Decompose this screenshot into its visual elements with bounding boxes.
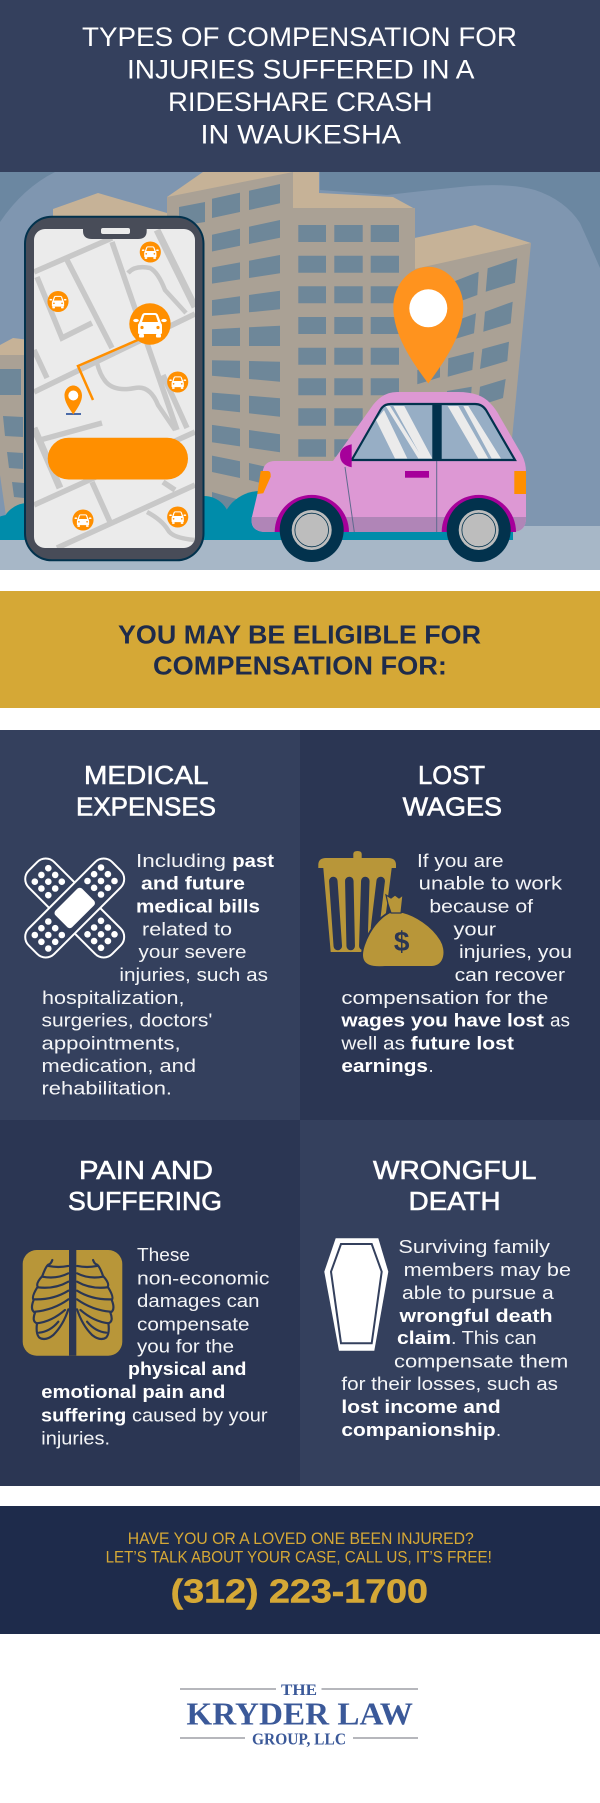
building: centre left [167, 172, 293, 530]
heading: wrongful death: DEATH [409, 1186, 501, 1216]
route line [78, 339, 140, 400]
big location pin [393, 267, 463, 384]
title banner [0, 0, 600, 172]
icon: bandages [20, 854, 129, 962]
title: RIDESHARE CRASH [168, 87, 432, 117]
body text: medical expenses: Including [136, 850, 226, 871]
icon: trash can and money bag: $ [394, 926, 410, 957]
phone number: (312) 223-1700 [171, 1573, 428, 1610]
body text: pain and suffering [41, 1244, 269, 1448]
heading: pain and suffering: SUFFERING [68, 1186, 222, 1216]
icon: coffin [324, 1238, 388, 1351]
eligibility heading: YOU MAY BE ELIGIBLE FOR [118, 620, 481, 650]
map roads [34, 230, 195, 548]
call to action text: LET’S TALK ABOUT YOUR CASE, CALL US, IT’S FREE! [106, 1548, 492, 1566]
eligibility banner [0, 591, 600, 708]
body text: wrongful death: claim [397, 1327, 451, 1348]
body text: medical expenses: hospitalization, [42, 987, 184, 1008]
car markers [47, 241, 188, 531]
body text: wrongful death: Surviving family [398, 1236, 551, 1257]
body text: medical expenses: medical bills [136, 896, 260, 916]
notch [83, 228, 147, 239]
icon: rib cage [23, 1250, 122, 1356]
car [252, 392, 526, 562]
ground [0, 540, 500, 570]
body text: medical expenses: and future [141, 872, 245, 894]
body text: wrongful death: . This can [451, 1327, 536, 1348]
building: centre [293, 172, 415, 461]
body text: wrongful death: able to pursue a [402, 1282, 555, 1303]
building: far left [0, 338, 24, 514]
body text: lost wages: can recover [455, 964, 565, 985]
body text: lost wages: injuries, you [459, 941, 572, 962]
heading: pain and suffering [68, 1155, 222, 1216]
body text: wrongful death: for their losses, such as [341, 1373, 558, 1394]
body text: lost wages: well as [340, 1032, 405, 1054]
body text: lost wages: . [428, 1055, 434, 1076]
body text: medical expenses: past [232, 850, 274, 871]
title: IN WAUKESHA [200, 120, 401, 150]
body text: lost wages [340, 850, 572, 1076]
phone [25, 217, 204, 560]
title: INJURIES SUFFERED IN A [127, 54, 475, 84]
body text: pain and suffering: compensate [137, 1313, 250, 1334]
body text: pain and suffering: injuries. [41, 1428, 110, 1448]
panel: lost wages [300, 730, 600, 1120]
body text: lost wages: as [550, 1010, 570, 1030]
body text: pain and suffering: These [137, 1244, 190, 1265]
body text: lost wages: compensation for the [341, 987, 548, 1008]
panel: medical expenses [0, 730, 300, 1120]
call to action banner [0, 1506, 600, 1634]
panel: wrongful death [300, 1120, 600, 1486]
orange button [48, 438, 188, 480]
body text: lost wages: If you are [417, 850, 504, 871]
illustration: city, phone and car [0, 172, 600, 570]
building: right [415, 225, 531, 438]
body text: medical expenses: medication, and [42, 1055, 196, 1076]
panel: pain and suffering [0, 1120, 300, 1486]
eligibility heading [118, 620, 481, 681]
heading: wrongful death: WRONGFUL [373, 1155, 536, 1185]
heading: pain and suffering: PAIN AND [79, 1155, 213, 1185]
ground: far right [513, 526, 600, 540]
windows [352, 404, 515, 460]
title [82, 22, 517, 150]
call to action text [106, 1530, 492, 1566]
eligibility heading: COMPENSATION FOR: [153, 651, 447, 681]
body text: medical expenses [42, 850, 274, 1098]
body text: lost wages: unable to work [419, 872, 563, 894]
body text: lost wages: future lost [411, 1032, 514, 1054]
body text: medical expenses: rehabilitation. [42, 1078, 172, 1098]
bushes [0, 491, 513, 540]
heading: lost wages [403, 760, 502, 822]
title: TYPES OF COMPENSATION FOR [82, 22, 517, 52]
body text: medical expenses: appointments, [42, 1032, 181, 1054]
logo [180, 1682, 418, 1749]
logo: GROUP, LLC [252, 1730, 346, 1749]
heading: medical expenses: MEDICAL [84, 760, 208, 790]
logo: KRYDER LAW [186, 1696, 413, 1732]
body text: lost wages: earnings [341, 1055, 428, 1076]
body text: wrongful death [341, 1236, 571, 1440]
body text: medical expenses: related to [142, 918, 232, 940]
logo: THE [281, 1682, 317, 1699]
body text: lost wages: wages you have lost [340, 1010, 544, 1030]
body text: wrongful death: members may be [404, 1259, 571, 1280]
body text: pain and suffering: you for the [137, 1336, 234, 1357]
call to action text: HAVE YOU OR A LOVED ONE BEEN INJURED? [128, 1530, 474, 1548]
body text: pain and suffering: damages can [137, 1290, 260, 1311]
building: back behind phone [53, 193, 167, 216]
body text: medical expenses: surgeries, doctors' [42, 1010, 212, 1030]
body text: pain and suffering: physical and [128, 1358, 246, 1379]
body text: lost wages: your [454, 918, 496, 940]
body text: pain and suffering: suffering [41, 1404, 126, 1425]
body text: medical expenses: injuries, such as [119, 964, 268, 985]
body text: pain and suffering: caused by your [132, 1404, 268, 1425]
heading: medical expenses: EXPENSES [76, 792, 216, 822]
body text: lost wages: because of [429, 896, 534, 916]
wheels [275, 495, 516, 562]
body text: wrongful death: companionship [341, 1419, 496, 1440]
heading: wrongful death [373, 1155, 536, 1216]
icon: trash can and money bag [318, 851, 444, 967]
body text: pain and suffering: non-economic [137, 1268, 269, 1289]
body text: medical expenses: your severe [138, 941, 246, 962]
body text: wrongful death: lost income and [341, 1396, 501, 1417]
heading: medical expenses [76, 760, 216, 822]
body text: wrongful death: wrongful death [398, 1305, 553, 1326]
body text: pain and suffering: emotional pain and [41, 1381, 225, 1402]
body text: wrongful death: compensate them [394, 1350, 568, 1371]
heading: lost wages: LOST [418, 760, 485, 790]
heading: lost wages: WAGES [403, 792, 502, 822]
body text: wrongful death: . [496, 1419, 501, 1440]
small pin [64, 386, 82, 415]
